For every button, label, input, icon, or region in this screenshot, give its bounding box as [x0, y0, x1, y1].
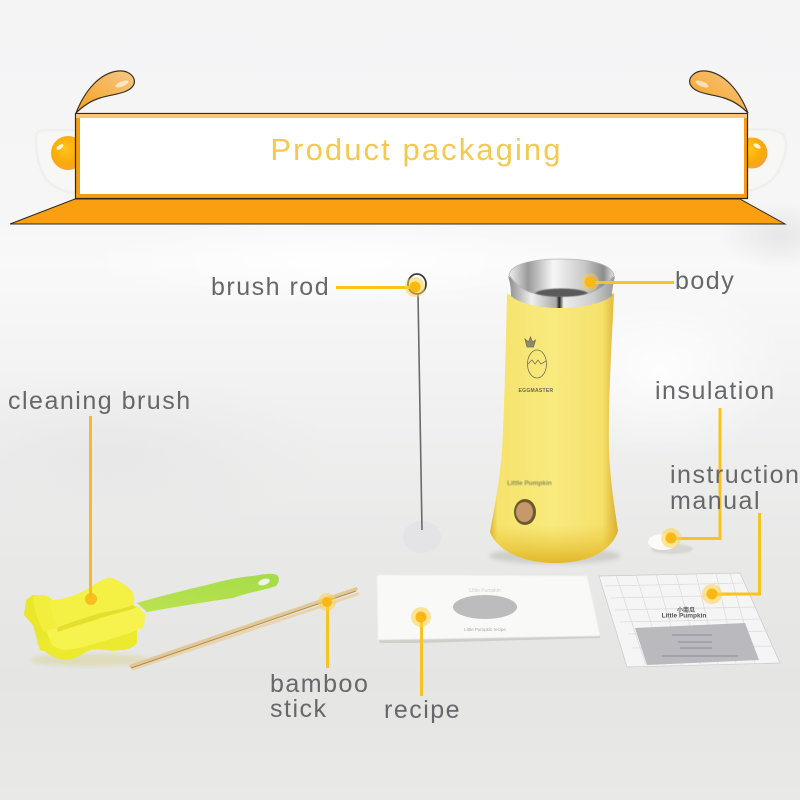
callout: bamboo stick: stick — [270, 695, 328, 723]
callout: bamboo stick — [270, 593, 369, 723]
callout: bamboo stick: bamboo — [270, 670, 369, 698]
product: instruction manual: 小南瓜 — [677, 606, 695, 614]
product: brush rod — [403, 274, 441, 553]
callout: recipe — [384, 607, 461, 724]
product: insulation cap — [648, 534, 693, 554]
icon: right fried egg — [736, 129, 786, 191]
callout: body — [581, 267, 735, 295]
callout: brush rod: brush rod — [211, 273, 330, 301]
callout: instruction manual: instruction — [670, 461, 800, 489]
ledge — [10, 199, 785, 224]
product: bamboo stick — [131, 589, 358, 669]
callout: recipe: recipe — [384, 696, 461, 724]
callout: cleaning brush: cleaning brush — [8, 387, 192, 415]
product: recipe booklet: Little Pumpkin — [469, 588, 501, 594]
callout: cleaning brush — [8, 387, 192, 605]
callout: body: body — [675, 267, 735, 295]
icon: right yolk drop — [690, 71, 748, 113]
callout: insulation: insulation — [655, 377, 776, 405]
icon: left fried egg — [36, 130, 85, 193]
product: instruction manual — [599, 573, 780, 667]
callout: insulation — [655, 377, 776, 548]
sponge — [24, 578, 145, 660]
callout: instruction manual: manual — [670, 487, 761, 515]
product: instruction manual: Little Pumpkin — [662, 612, 706, 620]
banner — [10, 71, 786, 224]
callout: instruction manual — [670, 461, 800, 604]
brush handle — [137, 574, 279, 612]
product: cleaning brush — [24, 574, 279, 666]
product: recipe booklet — [377, 575, 600, 643]
logo — [525, 337, 546, 378]
title: Product packaging — [270, 132, 563, 167]
power button — [514, 499, 536, 525]
callout: brush rod — [211, 273, 425, 301]
product: body — [489, 259, 621, 564]
product: body: Little Pumpkin — [507, 480, 552, 487]
funnel — [508, 276, 615, 308]
product: recipe booklet: Little Pumpkin recipe — [464, 627, 506, 632]
icon: left yolk drop — [76, 71, 134, 113]
product: body: EGGMASTER — [519, 388, 554, 394]
banner frame — [76, 114, 748, 198]
